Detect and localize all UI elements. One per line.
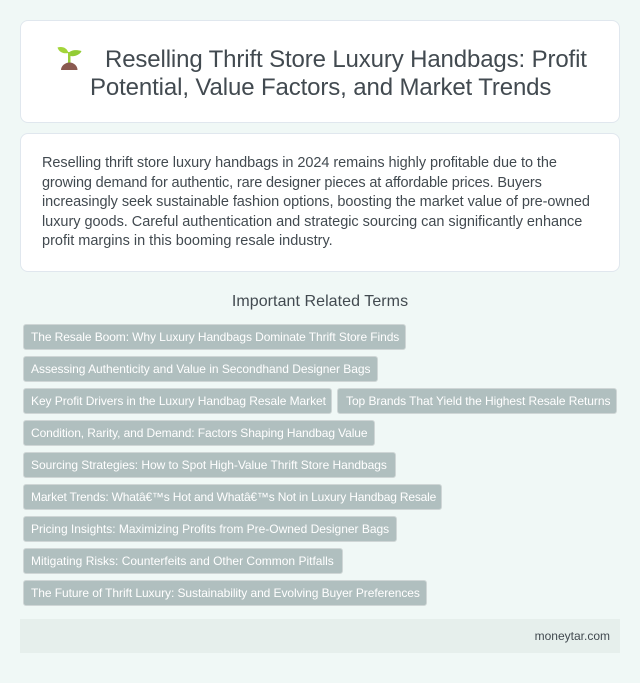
- tag 1: [23, 324, 406, 350]
- heading: important related terms: Important Related Terms: [232, 293, 408, 310]
- tag 8: Pricing Insights: Maximizing Profits from Pre-Owned Designer Bags: [31, 522, 389, 536]
- related terms list: [23, 324, 617, 606]
- tag 4: [337, 388, 617, 414]
- tag 10: The Future of Thrift Luxury: Sustainability and Evolving Buyer Preferences: [31, 586, 420, 600]
- tag 2: Assessing Authenticity and Value in Secondhand Designer Bags: [31, 362, 371, 376]
- tag 3: Key Profit Drivers in the Luxury Handbag Resale Market: [31, 394, 326, 408]
- footer source: moneytar.com: [535, 629, 610, 643]
- tag 4: Top Brands That Yield the Highest Resale Returns: [346, 394, 610, 408]
- intro text: luxury goods. Careful authentication and strategic sourcing can significantly enhance: [42, 214, 582, 230]
- tag 7: [23, 484, 442, 510]
- intro text: [42, 155, 590, 249]
- tag 5: Condition, Rarity, and Demand: Factors Shaping Handbag Value: [31, 426, 367, 440]
- tag 3: [23, 388, 332, 414]
- title line 2: Potential, Value Factors, and Market Trends: [90, 74, 551, 101]
- tag 2: [23, 356, 378, 382]
- tag 1: The Resale Boom: Why Luxury Handbags Dominate Thrift Store Finds: [31, 330, 399, 344]
- intro text: profit margins in this booming resale industry.: [42, 233, 333, 249]
- tag 5: [23, 420, 375, 446]
- icon: seedling: [58, 47, 82, 70]
- intro text: growing demand for authentic, rare designer pieces at affordable prices. Buyers: [42, 174, 542, 190]
- panel: title card: [20, 20, 620, 123]
- intro text: increasingly seek sustainable fashion options, boosting the market value of pre-owned: [42, 194, 590, 210]
- tag 6: [23, 452, 396, 478]
- tag 9: [23, 548, 343, 574]
- tag 7: Market Trends: Whatâ€™s Hot and Whatâ€™s Not in Luxury Handbag Resale: [31, 490, 436, 504]
- tag 10: [23, 580, 427, 606]
- footer bar: [20, 619, 620, 653]
- intro text: Reselling thrift store luxury handbags in 2024 remains highly profitable due to the: [42, 155, 557, 171]
- tag 9: Mitigating Risks: Counterfeits and Other Common Pitfalls: [31, 554, 334, 568]
- tag 6: Sourcing Strategies: How to Spot High-Value Thrift Store Handbags: [31, 458, 387, 472]
- tag 8: [23, 516, 397, 542]
- title line 1: Reselling Thrift Store Luxury Handbags: Profit: [105, 46, 587, 73]
- panel: intro text card: [20, 133, 620, 272]
